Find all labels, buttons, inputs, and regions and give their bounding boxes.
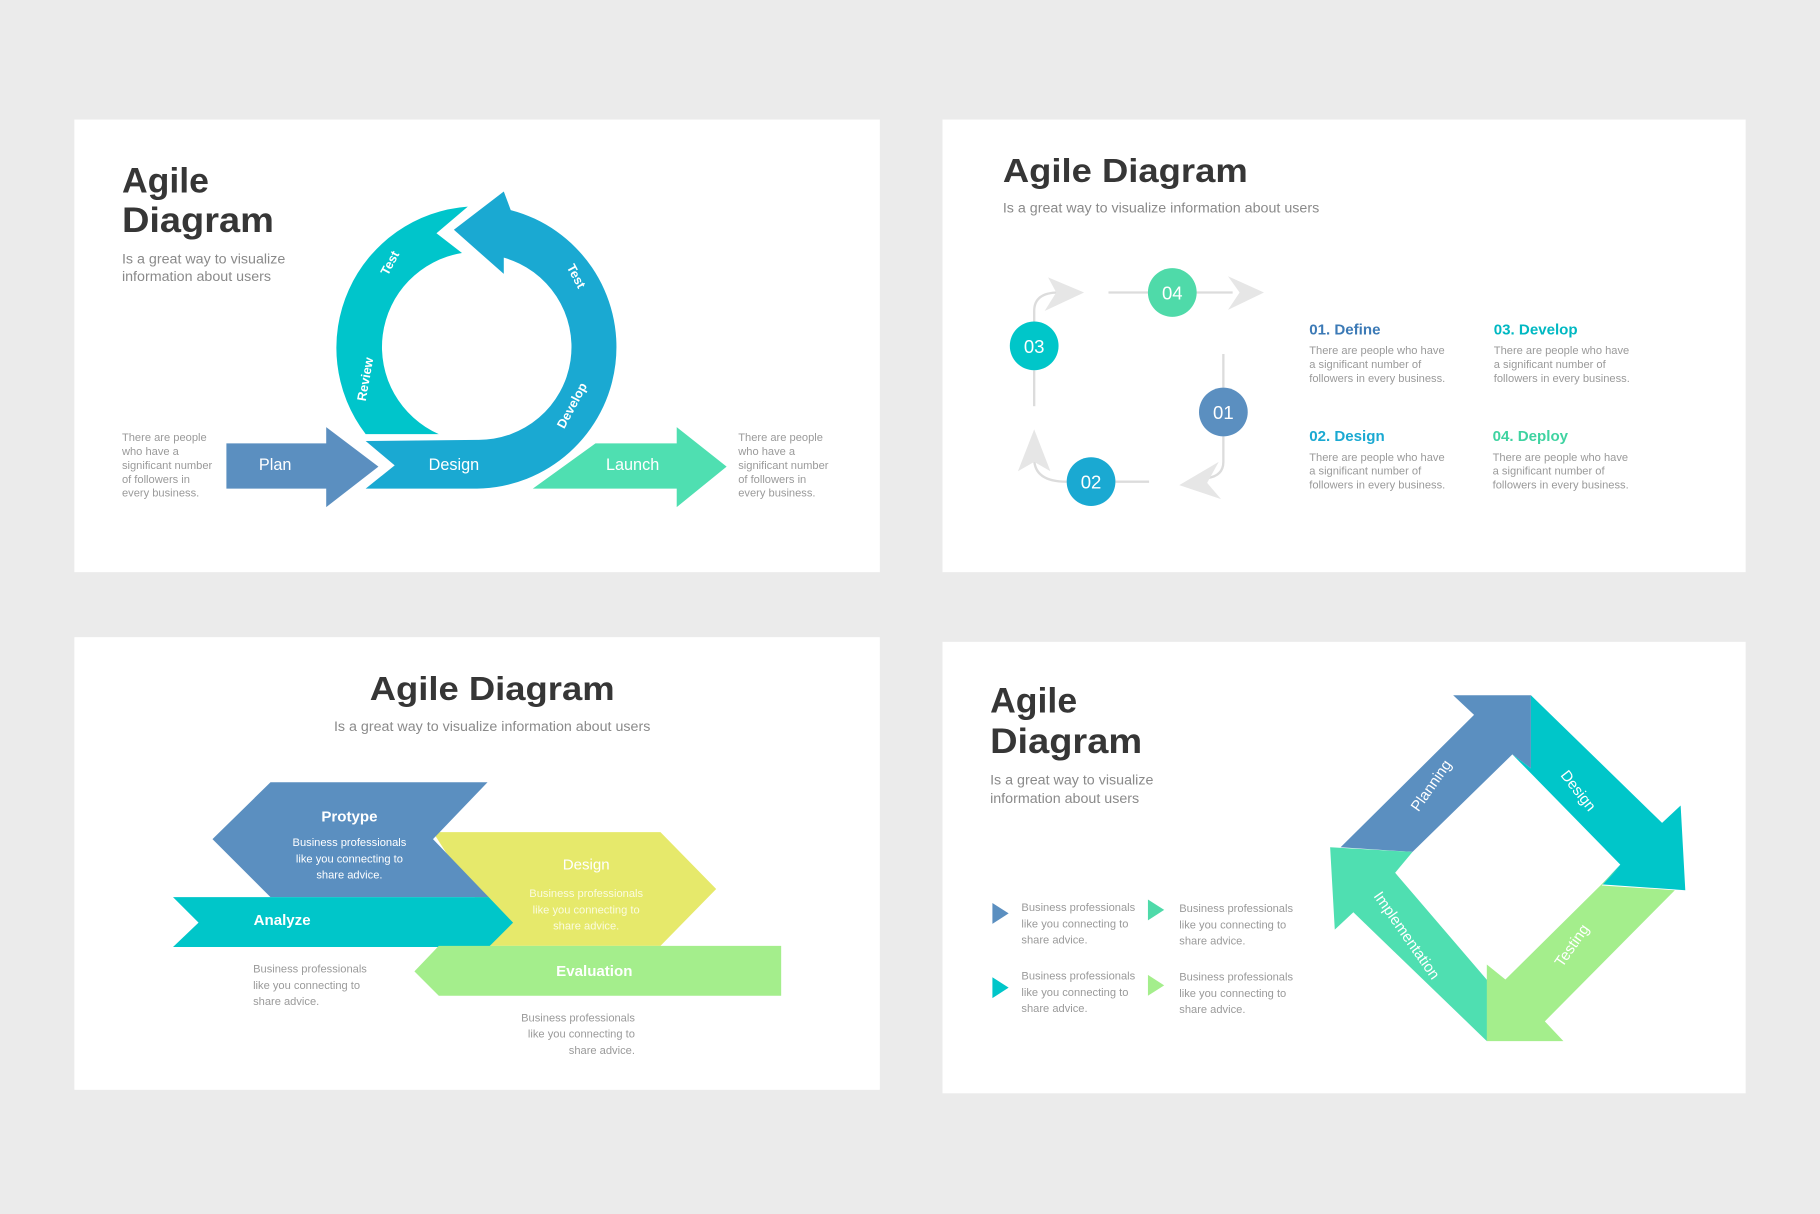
text: right note: who have a [737, 446, 796, 458]
text: left note: There are people [122, 432, 207, 444]
title: Diagram [990, 722, 1142, 761]
left arc Review/Test [336, 207, 468, 434]
circle 04 [1148, 268, 1197, 317]
panel: diamond cycle [942, 642, 1746, 1093]
panel: circular agile arrow [74, 120, 880, 572]
title [990, 682, 1142, 761]
text: left note: who have a [121, 446, 180, 458]
text: left note: of followers in [122, 474, 190, 486]
arrow: Implementation: Implementation [1370, 889, 1443, 983]
arrow: Plan: Plan [259, 456, 291, 474]
item: Define: a significant number of [1309, 359, 1422, 371]
item: Develop: followers in every business. [1494, 373, 1630, 385]
right arc Design/Develop/Test: Design [429, 456, 479, 474]
bullet list [992, 899, 1293, 1016]
left arc Review/Test: Test [377, 248, 403, 278]
subtitle [990, 773, 1153, 807]
item: Deploy [1493, 428, 1629, 492]
shape: Protype [212, 782, 489, 897]
shape: Protype: share advice. [316, 870, 383, 882]
subtitle: Is a great way to visualize [990, 773, 1153, 789]
text: right note: There are people [738, 432, 823, 444]
bullet list: Business professionals [1021, 971, 1136, 983]
arrow: Design [1512, 695, 1685, 890]
item: Define [1309, 321, 1445, 385]
title [122, 162, 274, 240]
shape: Design: share advice. [553, 921, 619, 933]
shape: Analyze [173, 897, 513, 947]
text: Analyze desc: like you connecting to [253, 980, 360, 992]
title: Agile [990, 682, 1077, 721]
shape: Design: Design [563, 856, 610, 873]
circle 01 [1199, 388, 1248, 436]
item: Deploy: a significant number of [1493, 466, 1605, 478]
bullet list: Business professionals [1021, 902, 1136, 914]
shape: Evaluation [414, 946, 781, 996]
shape: Design [433, 832, 716, 946]
bullet list: share advice. [1179, 936, 1245, 948]
item: Develop [1494, 321, 1630, 385]
subtitle [122, 251, 285, 285]
item: Develop: a significant number of [1494, 359, 1607, 371]
bullet list: share advice. [1021, 935, 1088, 947]
text: left note [121, 432, 213, 500]
item: Design [1309, 428, 1445, 492]
left arc Review/Test: Review [354, 356, 376, 402]
item: Develop: There are people who have [1494, 345, 1629, 357]
bullet list: like you connecting to [1179, 988, 1286, 1000]
text: right note [737, 432, 829, 500]
right arc Design/Develop/Test: Test [564, 261, 589, 291]
circle 02: 02 [1081, 472, 1101, 493]
bullet list: share advice. [1021, 1003, 1088, 1015]
item: Design: a significant number of [1309, 466, 1422, 478]
shape: Design: Business professionals [529, 888, 644, 900]
text: right note: significant number [738, 460, 829, 472]
item: Deploy: There are people who have [1493, 452, 1628, 464]
text: Analyze desc: Business professionals [253, 964, 367, 976]
item: Deploy: 04. Deploy [1493, 428, 1569, 445]
arrow: Launch: Launch [606, 456, 659, 474]
bullet list: Business professionals [1179, 972, 1293, 984]
subtitle: information about users [122, 269, 271, 285]
text: right note: every business. [738, 488, 816, 500]
right arc Design/Develop/Test: Develop [554, 380, 590, 431]
bullet list: like you connecting to [1021, 987, 1128, 999]
item: Design: followers in every business. [1309, 480, 1445, 492]
subtitle: Is a great way to visualize information about users [334, 719, 650, 735]
text: Evaluation desc: Business professionals [521, 1012, 635, 1024]
right arc Design/Develop/Test [366, 192, 616, 489]
title: Agile Diagram [1003, 153, 1248, 190]
arrow: Implementation [1330, 847, 1493, 1041]
bullet list: like you connecting to [1179, 919, 1286, 931]
arrow: Planning: Planning [1408, 757, 1455, 815]
subtitle: information about users [990, 791, 1139, 807]
arrow: Testing: Testing [1552, 921, 1593, 970]
bullet list: share advice. [1179, 1004, 1245, 1016]
text: Analyze desc: share advice. [253, 996, 319, 1008]
connectors [1034, 292, 1233, 482]
item: Define: 01. Define [1309, 321, 1380, 338]
item: Deploy: followers in every business. [1493, 480, 1629, 492]
shape: Protype: Business professionals [293, 837, 407, 849]
title: Agile [122, 162, 209, 201]
text: Evaluation desc: share advice. [569, 1045, 635, 1057]
arrow: Design: Design [1557, 767, 1599, 815]
text: Evaluation desc: like you connecting to [528, 1029, 635, 1041]
text: left note: every business. [122, 488, 199, 500]
bullet list: like you connecting to [1021, 918, 1128, 930]
text: right note: of followers in [738, 474, 806, 486]
title: Agile Diagram [370, 671, 615, 708]
arrow: Launch [533, 427, 727, 507]
text: Analyze desc [253, 964, 367, 1008]
subtitle: Is a great way to visualize information about users [1003, 200, 1319, 216]
circle 03 [1010, 321, 1059, 370]
item: Define: followers in every business. [1309, 373, 1445, 385]
circle 03: 03 [1024, 336, 1045, 357]
arrow: Testing [1487, 866, 1675, 1041]
item: Define: There are people who have [1309, 345, 1445, 357]
circle 01: 01 [1213, 402, 1234, 423]
panel: numbered cycle [942, 120, 1746, 572]
shape: Protype: Protype [321, 809, 377, 826]
shape: Protype: like you connecting to [296, 853, 403, 865]
subtitle: Is a great way to visualize [122, 251, 285, 267]
circle 02 [1067, 457, 1115, 506]
shape: Analyze: Analyze [254, 912, 311, 929]
item: Design: 02. Design [1309, 428, 1385, 445]
panel: chevron stack [74, 637, 880, 1090]
text: left note: significant number [122, 460, 213, 472]
arrowheads [1018, 276, 1264, 499]
item: Design: There are people who have [1309, 452, 1445, 464]
bullet list: Business professionals [1179, 903, 1293, 915]
item: Develop: 03. Develop [1494, 321, 1578, 338]
arrow: Plan [226, 427, 378, 507]
text: Evaluation desc [521, 1012, 635, 1057]
title: Diagram [122, 201, 274, 240]
shape: Evaluation: Evaluation [556, 963, 632, 980]
arrow: Planning [1341, 695, 1531, 852]
circle 04: 04 [1162, 282, 1183, 303]
shape: Design: like you connecting to [533, 904, 640, 916]
